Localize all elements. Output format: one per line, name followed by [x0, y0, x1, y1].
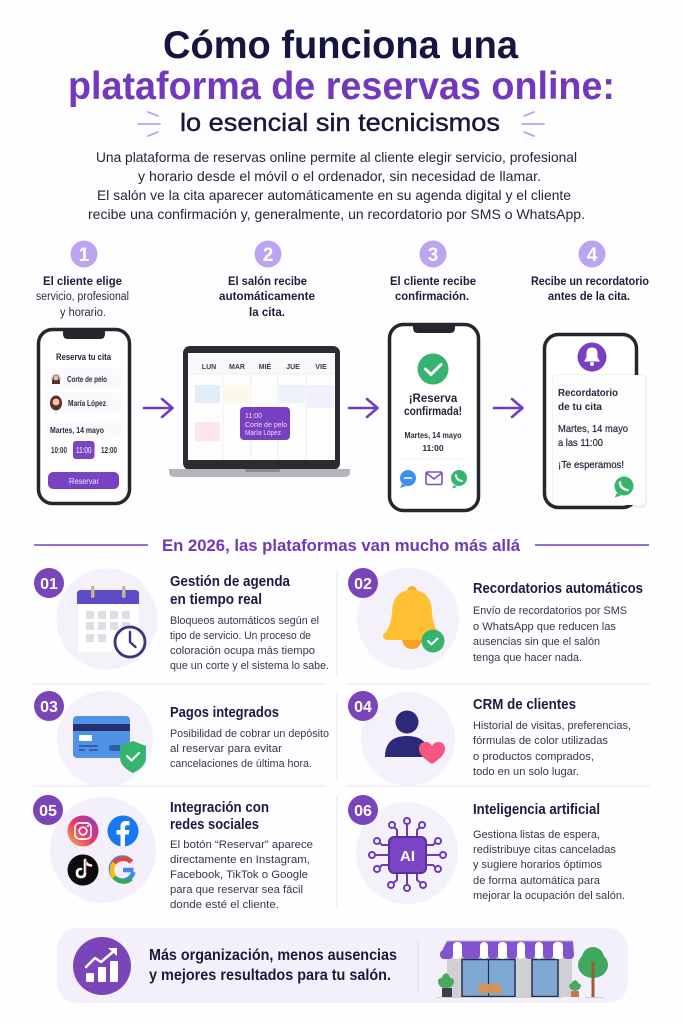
footer message [149, 947, 397, 984]
feature 01 text: Gestión de agenda [170, 574, 291, 590]
feature 02 text [473, 581, 643, 664]
step 1 caption: y horario. [60, 307, 106, 319]
icon: credit card with shield [57, 691, 153, 787]
icon: calendar with clock [56, 568, 158, 670]
phone: reminder: Martes, 14 mayo [558, 423, 628, 435]
step number 4: 4 [587, 245, 598, 266]
phone: reminder: ¡Te esperamos! [558, 460, 624, 471]
badge 03: 03 [40, 699, 58, 716]
phone: booking form: 12:00 [101, 446, 117, 455]
intro paragraph [88, 149, 585, 222]
step number 3: 3 [428, 245, 438, 266]
illustration: salon storefront [437, 941, 608, 998]
step 2 [169, 240, 350, 477]
step 4 caption [531, 276, 649, 303]
feature 01 text: Bloqueos automáticos según el [170, 615, 319, 627]
step number 2: 2 [263, 245, 273, 266]
step 1 [36, 240, 130, 504]
feature 05 text: Facebook, TikTok o Google [170, 869, 308, 881]
laptop with calendar: María López [245, 430, 281, 437]
feature 05 text: Integración con [170, 800, 269, 816]
badge 02 [348, 568, 378, 598]
feature 06 text: Inteligencia artificial [473, 802, 600, 818]
feature 03 [34, 691, 329, 787]
step 4 caption: Recibe un recordatorio [531, 276, 649, 288]
arrow 2 to 3 [349, 399, 378, 417]
phone: reminder: de tu cita [558, 401, 602, 413]
phone: booking form: Reserva tu cita [56, 352, 112, 362]
phone: booking form: 11:00 [76, 446, 92, 455]
feature 06 [348, 795, 625, 904]
feature 04 text: fórmulas de color utilizadas [473, 735, 608, 747]
phone: confirmation: ¡Reserva [409, 393, 458, 405]
feature 05 [33, 795, 313, 911]
step 1 caption [36, 276, 129, 319]
badge 01 [34, 568, 64, 598]
badge 02: 02 [354, 576, 372, 593]
step 1 caption: servicio, profesional [36, 291, 129, 303]
feature 03 text: Pagos integrados [170, 705, 279, 721]
feature 03 text: cancelaciones de última hora. [170, 758, 312, 770]
feature 04 text: o productos comprados, [473, 751, 594, 763]
feature 05 text: para que reservar sea fácil [170, 884, 303, 896]
intro paragraph: Una plataforma de reservas online permite al cliente elegir servicio, profesional [96, 149, 577, 165]
badge 01: 01 [40, 576, 58, 593]
badge 05 [33, 795, 63, 825]
title: Cómo funciona una [163, 24, 518, 67]
phone: reminder: Recordatorio [558, 387, 618, 399]
badge 06 [348, 795, 378, 825]
feature 06 text: de forma automática para [473, 875, 601, 887]
intro paragraph: El salón ve la cita aparecer automáticamente en su agenda digital y el cliente [97, 187, 571, 203]
phone: confirmation: Martes, 14 mayo [404, 430, 462, 440]
feature 01 text: que un corte y el sistema lo sabe. [170, 660, 329, 672]
step number 4 [578, 240, 606, 268]
laptop with calendar: VIE [315, 364, 327, 371]
feature 05 text: directamente en Instagram, [170, 854, 310, 866]
feature 04 text: Historial de visitas, preferencias, [473, 720, 631, 732]
badge 04: 04 [354, 699, 372, 716]
phone: booking form [38, 330, 130, 504]
feature 06 text: redistribuye citas canceladas [473, 844, 616, 856]
step 4 [531, 240, 649, 508]
feature 03 text [170, 705, 329, 770]
step 3 caption: El cliente recibe [390, 276, 476, 288]
feature 04 [348, 691, 631, 786]
badge 05: 05 [39, 803, 57, 820]
feature 06 text: Gestiona listas de espera, [473, 829, 600, 841]
badge 04 [348, 691, 378, 721]
laptop with calendar: LUN [202, 364, 216, 371]
grid dividers [33, 570, 650, 908]
badge 03 [34, 691, 64, 721]
feature 05 text: donde esté el cliente. [170, 899, 279, 911]
feature 01 text: tipo de servicio. Un proceso de [170, 630, 311, 642]
feature 02 [348, 568, 643, 670]
title [68, 24, 615, 137]
feature 04 text [473, 697, 631, 778]
feature 02 text: Envío de recordatorios por SMS [473, 605, 627, 617]
laptop with calendar [169, 346, 350, 477]
feature 05 text [170, 800, 313, 911]
phone: confirmation: confirmada! [404, 406, 462, 418]
laptop with calendar: MIÉ [259, 362, 272, 371]
phone: booking form: Corte de pelo [67, 375, 107, 384]
step 3 [390, 240, 478, 510]
phone: confirmation [390, 324, 478, 510]
feature 04 text: todo en un solo lugar. [473, 766, 579, 778]
feature 02 text: ausencias sin que el salón [473, 636, 600, 648]
badge 06: 06 [354, 803, 372, 820]
laptop with calendar: MAR [229, 364, 245, 371]
feature 04 text: CRM de clientes [473, 697, 576, 713]
feature 02 text: tenga que hacer nada. [473, 652, 582, 664]
section heading: En 2026, las plataformas van mucho más allá [162, 536, 521, 555]
step 2 caption: automáticamente [219, 291, 315, 303]
icon: social networks [50, 797, 156, 903]
title: lo esencial sin tecnicismos [180, 109, 500, 137]
step number 3 [420, 240, 446, 268]
step 2 caption: El salón recibe [228, 276, 307, 288]
decorative rays left [138, 112, 160, 136]
step 4 caption: antes de la cita. [548, 291, 630, 303]
step 2 caption: la cita. [249, 307, 285, 319]
feature 01 text: en tiempo real [170, 592, 262, 608]
feature 02 text: o WhatsApp que reducen las [473, 621, 616, 633]
step 1 caption: El cliente elige [43, 276, 122, 288]
arrow 3 to 4 [494, 399, 522, 417]
icon: AI chip: AI [400, 848, 415, 865]
icon: growth chart [73, 937, 131, 995]
footer message: Más organización, menos ausencias [149, 947, 397, 964]
step number 1: 1 [79, 245, 90, 266]
feature 03 text: Posibilidad de cobrar un depósito [170, 728, 329, 740]
laptop with calendar: 11:00 [245, 413, 262, 420]
arrow 1 to 2 [144, 399, 172, 417]
step number 2 [254, 240, 282, 268]
icon: client with heart [361, 692, 455, 786]
feature 01 text [170, 574, 329, 672]
intro paragraph: y horario desde el móvil o el ordenador, sin necesidad de llamar. [138, 168, 541, 184]
feature 01 text: coloración ocupa más tiempo [170, 645, 315, 657]
feature 05 text: El botón “Reservar” aparece [170, 839, 313, 851]
phone: reminder [544, 334, 647, 508]
feature 03 text: al reservar para evitar [170, 743, 282, 755]
step number 1 [70, 240, 98, 268]
feature 06 text: mejorar la ocupación del salón. [473, 890, 625, 902]
step 2 caption [219, 276, 315, 319]
phone: booking form: Martes, 14 mayo [50, 425, 104, 435]
step 3 caption: confirmación. [395, 291, 469, 303]
feature 05 text: redes sociales [170, 817, 259, 833]
title: plataforma de reservas online: [68, 65, 615, 108]
laptop with calendar: JUE [286, 364, 300, 371]
decorative rays right [522, 112, 544, 136]
laptop with calendar: Corte de pelo [245, 422, 287, 429]
icon: bell with check [357, 568, 459, 670]
feature 02 text: Recordatorios automáticos [473, 581, 643, 597]
step 3 caption [390, 276, 476, 303]
icon: AI chip [356, 802, 458, 904]
phone: booking form: Reservar [69, 476, 99, 486]
phone: confirmation: 11:00 [422, 443, 444, 453]
phone: reminder: a las 11:00 [558, 437, 603, 449]
intro paragraph: recibe una confirmación y, generalmente, un recordatorio por SMS o WhatsApp. [88, 206, 585, 222]
phone: booking form: 10:00 [51, 446, 67, 455]
phone: booking form: María López [68, 399, 106, 408]
feature 01 [34, 568, 329, 672]
footer message: y mejores resultados para tu salón. [149, 967, 391, 984]
footer banner [57, 928, 628, 1003]
feature 06 text [473, 802, 625, 902]
feature 06 text: y sugiere horarios óptimos [473, 859, 602, 871]
